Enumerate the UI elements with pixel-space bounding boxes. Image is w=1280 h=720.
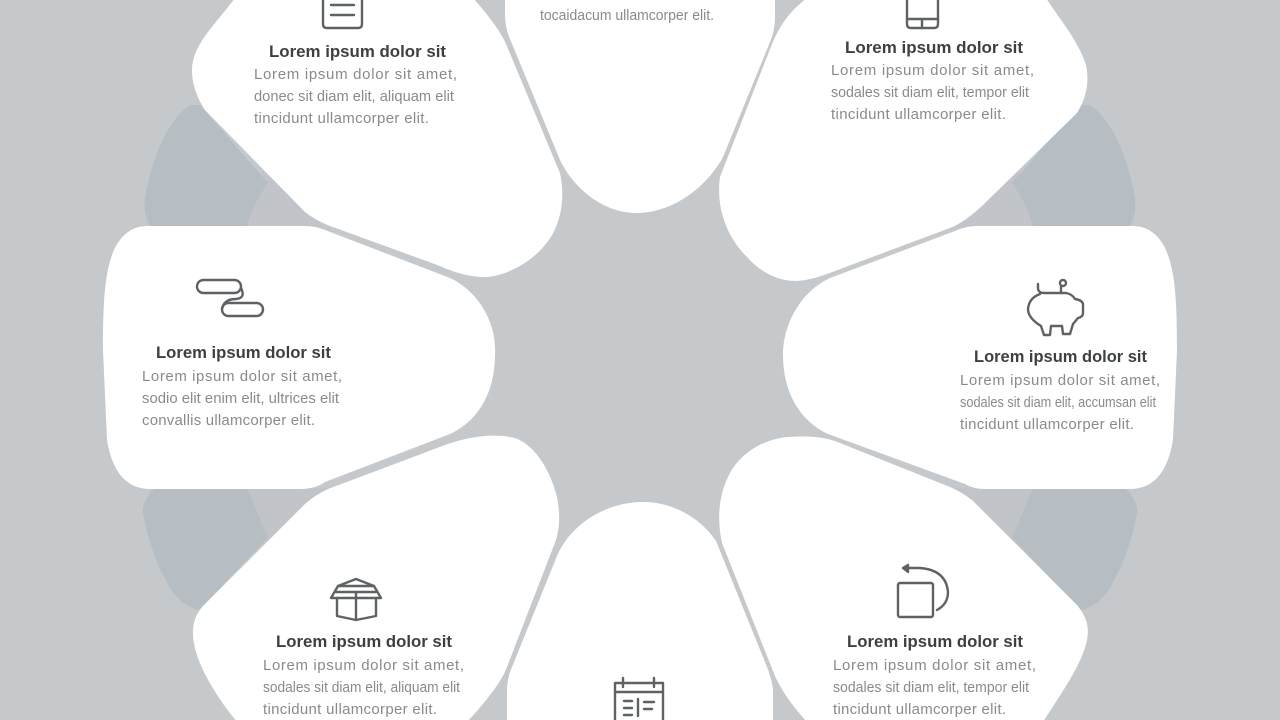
icon: open box [331, 579, 381, 620]
text block: top-left: Lorem ipsum dolor sit amet, [254, 66, 457, 83]
text block: right: tincidunt ullamcorper elit. [960, 416, 1134, 433]
text block: bottom-left: sodales sit diam elit, aliquam elit [263, 679, 461, 696]
text block: top-right: Lorem ipsum dolor sit amet, [831, 62, 1034, 79]
heading: left: Lorem ipsum dolor sit [156, 343, 331, 362]
text block: top-right [831, 62, 1034, 123]
icon: document [323, 0, 362, 28]
icon: piggy bank [1028, 280, 1083, 335]
panel: right petal [783, 226, 1177, 489]
text block: left: Lorem ipsum dolor sit amet, [142, 368, 342, 385]
panel: top petal [505, 0, 775, 213]
text block: bottom-right: sodales sit diam elit, tempor elit [833, 679, 1030, 696]
text block: bottom-right: Lorem ipsum dolor sit amet, [833, 657, 1036, 674]
text block: top-left: donec sit diam elit, aliquam elit [254, 88, 455, 105]
heading: bottom-left: Lorem ipsum dolor sit [276, 632, 452, 651]
text block: top-left: tincidunt ullamcorper elit. [254, 110, 429, 127]
text block: bottom-left [263, 657, 464, 718]
text block: right: Lorem ipsum dolor sit amet, [960, 372, 1160, 389]
text block: top-left [254, 66, 457, 127]
heading: right: Lorem ipsum dolor sit [974, 347, 1147, 366]
text block: right [960, 372, 1160, 433]
panel: left petal [103, 226, 495, 489]
icon: calendar [615, 678, 663, 720]
panel: top-right petal [719, 0, 1087, 281]
panel: bottom-left petal [193, 436, 559, 720]
icon: phone [907, 0, 938, 28]
decorative corner wedges [240, 170, 1040, 545]
panel: top-left petal [192, 0, 562, 277]
text block: left [142, 368, 342, 429]
text block: top-right: sodales sit diam elit, tempor elit [831, 84, 1030, 101]
text block: left: sodio elit enim elit, ultrices elit [142, 390, 340, 407]
text block: right: sodales sit diam elit, accumsan elit [960, 394, 1157, 411]
text: top petal last line: tocaidacum ullamcorper elit. [540, 7, 714, 24]
text block: bottom-right: tincidunt ullamcorper elit. [833, 701, 1006, 718]
panel: bottom petal [507, 502, 773, 720]
text block: bottom-left: tincidunt ullamcorper elit. [263, 701, 437, 718]
text block: top-right: tincidunt ullamcorper elit. [831, 106, 1006, 123]
heading: bottom-right: Lorem ipsum dolor sit [847, 632, 1023, 651]
heading: top-right: Lorem ipsum dolor sit [845, 38, 1023, 57]
text block: bottom-left: Lorem ipsum dolor sit amet, [263, 657, 464, 674]
panel: bottom-right petal [719, 436, 1088, 720]
text block: bottom-right [833, 657, 1036, 718]
icon: rotate square [898, 565, 948, 617]
text block: left: convallis ullamcorper elit. [142, 412, 315, 429]
decorative corner blobs [143, 105, 1137, 610]
heading: top-left: Lorem ipsum dolor sit [269, 42, 446, 61]
icon: linked pills [197, 280, 263, 316]
